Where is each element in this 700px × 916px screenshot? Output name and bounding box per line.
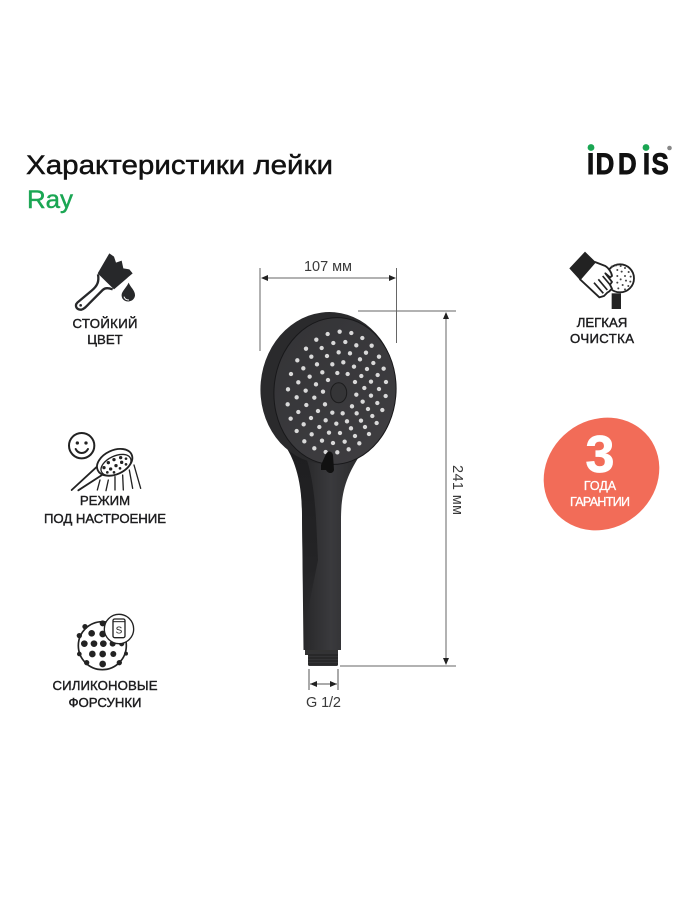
badge: 3 year warranty: ГАРАНТИИ — [570, 495, 630, 509]
icon: silicone nozzles: S — [116, 626, 123, 637]
centre button — [331, 383, 347, 403]
subtitle: model name: Ray — [27, 186, 74, 214]
label: silicone nozzles: ФОРСУНКИ — [68, 695, 142, 710]
label: easy cleaning: ОЧИСТКА — [570, 331, 634, 346]
icon: paint brush with drop — [76, 253, 135, 310]
badge: 3 year warranty: 3 — [586, 426, 614, 484]
logo: IDDIS: I — [643, 147, 650, 180]
logo: IDDIS: S — [652, 147, 669, 180]
label: easy cleaning: ЛЕГКАЯ — [577, 315, 627, 330]
mode switch — [321, 451, 334, 473]
badge: 3 year warranty — [521, 395, 682, 553]
label: silicone nozzles: СИЛИКОНОВЫЕ — [52, 678, 158, 693]
icon: silicone nozzles — [77, 614, 134, 670]
icon: easy cleaning hand — [569, 252, 634, 309]
logo: IDDIS — [587, 144, 672, 180]
logo: IDDIS: D — [618, 147, 637, 180]
logo: IDDIS: I — [587, 147, 594, 180]
nozzles — [285, 329, 388, 454]
label: silicone nozzles — [52, 678, 158, 710]
label: mood mode: РЕЖИМ — [80, 493, 130, 508]
head back shell — [254, 306, 402, 470]
thread connector — [305, 649, 338, 666]
handle — [284, 444, 362, 650]
label: stable colour: СТОЙКИЙ — [72, 316, 138, 331]
dimension: height 241 mm: 241 мм — [449, 465, 465, 515]
logo: IDDIS: D — [596, 147, 614, 180]
icon: smile and shower — [69, 433, 141, 491]
label: stable colour: ЦВЕТ — [87, 332, 123, 347]
badge: 3 year warranty: ГОДА — [584, 479, 617, 493]
label: mood mode — [44, 493, 166, 526]
title: Характеристики лейки — [26, 150, 333, 180]
head face — [268, 312, 402, 470]
dimension: thread G 1/2 — [306, 669, 341, 711]
shower head product image — [254, 306, 402, 666]
label: stable colour — [72, 316, 138, 347]
label: mood mode: ПОД НАСТРОЕНИЕ — [44, 511, 166, 526]
dimension: thread G 1/2: G 1/2 — [306, 695, 341, 711]
label: easy cleaning — [570, 315, 634, 346]
dimension: width 107 mm: 107 мм — [304, 259, 352, 275]
dimension: width 107 mm — [260, 259, 396, 351]
dimension: height 241 mm — [340, 311, 465, 666]
